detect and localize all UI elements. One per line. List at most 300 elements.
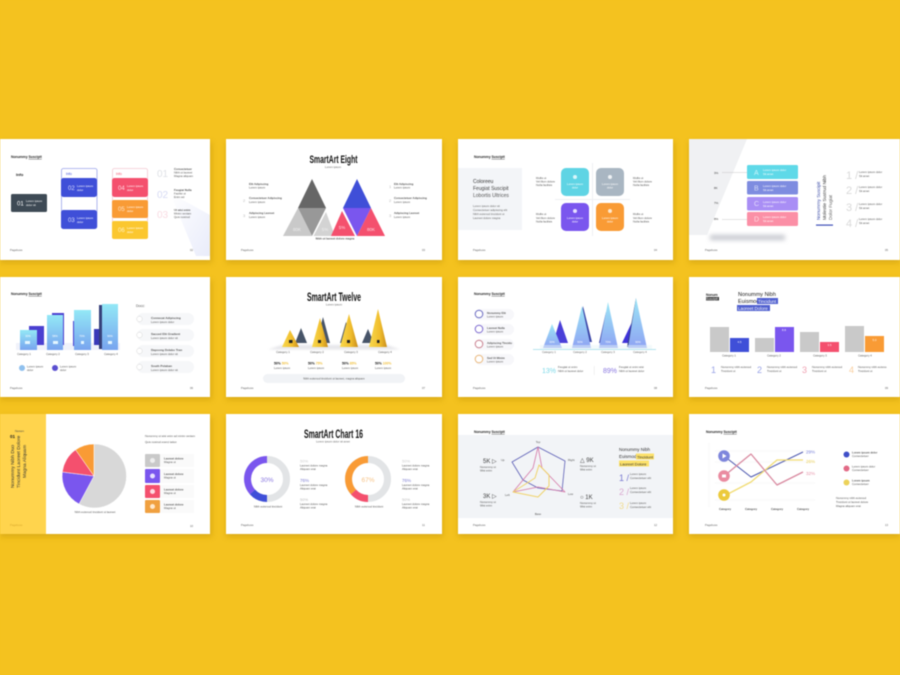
cone labels: Category 3 [344, 350, 358, 354]
stat 13%: 13% [542, 368, 556, 375]
big heading [737, 292, 778, 311]
numbered notes: Nonummy nibh euismod [812, 365, 843, 369]
footer: 12 [654, 523, 658, 527]
icon squares: Lorem ipsum [567, 216, 584, 220]
footer: Pageboss [705, 386, 718, 390]
card 01: dolor sit [26, 203, 36, 207]
legend cards [145, 454, 194, 513]
ring list: Adipiscing Tincidu [487, 341, 512, 345]
legend cards: Laoreet dolore [164, 472, 184, 476]
cone labels: Category 4 [378, 350, 392, 354]
card 01: Lorem ipsum [26, 199, 43, 203]
side panel [458, 168, 522, 230]
footer [10, 386, 194, 390]
legend: Lorem ipsum [60, 364, 77, 368]
numbered legend: Consectetuer elit [630, 476, 651, 480]
cone labels [276, 350, 392, 354]
card shadows [0, 142, 900, 537]
floor shadow [268, 345, 400, 350]
donut left [248, 460, 286, 498]
footer [473, 248, 658, 252]
column: cards 04, 05, 06: 04 [118, 186, 125, 192]
panel: SmartArt Eight triangles [226, 139, 442, 260]
legend: dolor [60, 368, 66, 372]
legend cards: Magna ut [164, 460, 176, 464]
numbered notes: Nonummy nibh euismo [858, 365, 887, 369]
note text: Tincidunt ut laoreet dolore [836, 500, 869, 504]
heading right [619, 447, 654, 466]
panel: paired bar chart [689, 277, 900, 397]
side labels: Mollis ut [536, 176, 546, 180]
column: cards 04, 05, 06: Lorem ipsum [127, 226, 144, 230]
radar stats: 5K ▷ [483, 459, 497, 465]
big heading: Euismod [738, 299, 759, 305]
column: cards 04, 05, 06: Info [116, 172, 122, 176]
left stats: 50% [300, 497, 308, 502]
ring list: Nonummy Elit [487, 311, 506, 315]
side labels: Nulla facilisis [536, 183, 553, 187]
footer [473, 523, 658, 527]
chart floor [16, 343, 120, 350]
numbered list: 01 [157, 169, 169, 180]
stat 13%: Feugiat ut enim [558, 365, 578, 369]
numbered legend: 3 / [619, 501, 630, 511]
footer: Pageboss [241, 523, 254, 527]
radar [512, 447, 565, 497]
numbered list: 02 [157, 190, 169, 201]
pyramid chart: 30% [549, 340, 555, 344]
numbered list: Lorem ipsum dolor [859, 170, 882, 174]
axis labels: Top [536, 440, 541, 444]
numbered legend [619, 472, 651, 511]
column: cards 04, 05, 06: dolor [127, 230, 133, 234]
numbered list: 3 / [846, 202, 859, 214]
side labels [536, 176, 652, 224]
pie caption: Nibh euismod tincidunt ut laoreet [75, 510, 116, 514]
legend: Lorem ipsum dolor [852, 450, 878, 454]
left list: 2 [243, 198, 246, 203]
list pills [137, 313, 194, 373]
triangle chart: colored [331, 179, 385, 236]
intro text: Quis nostrud exerci tation [145, 440, 177, 444]
donut right [348, 460, 388, 498]
page number: 10 [190, 524, 194, 528]
icon squares: dolor [607, 186, 613, 190]
side labels: Mollis ut [633, 176, 643, 180]
footer [10, 248, 194, 252]
panel: radar chart [458, 414, 673, 534]
legend [844, 450, 878, 486]
numbered legend: Lorem ipsum [630, 472, 647, 476]
right list: 1 [389, 184, 392, 189]
panel: four squares concept [458, 139, 673, 260]
bars [20, 304, 118, 350]
column: cards 04, 05, 06: 06 [118, 228, 125, 234]
note text [836, 496, 869, 508]
side panel: Lobortis Ultrices [473, 193, 509, 199]
bars A to D: B [754, 186, 759, 192]
numbered legend: 2 / [619, 487, 630, 497]
side panel: Feugiat Suscipit [473, 186, 509, 192]
footer [705, 386, 889, 390]
side panel: Consectetuer adipiscing elit [473, 208, 507, 212]
column: cards 04, 05, 06: dolor [127, 209, 133, 213]
footer: 03 [422, 248, 426, 252]
axis labels [17, 352, 118, 356]
pyramid chart [533, 298, 656, 350]
right list [389, 182, 427, 219]
intro text: Nonummy ut wisi enim ad minim veniam [145, 434, 196, 438]
bars A to D: Lorem ipsum dolor [763, 168, 786, 172]
series values: 29% [806, 450, 815, 454]
right stats: Laoreet dolore magna [402, 483, 430, 487]
triangle chart: gray: 80K [293, 227, 301, 232]
heading: Nonummy Suscipit [11, 292, 43, 296]
numbered list: Quis nostrud [174, 215, 190, 219]
list pills: Connecat Adipiscing [151, 316, 181, 320]
heading right: Tincidunt [637, 454, 654, 460]
subtitle: Lorem ipsum [326, 302, 343, 306]
legend: dolor [27, 368, 33, 372]
bars A to D [747, 165, 798, 226]
stat 13% [542, 365, 583, 375]
vertical heading: Nonummy Suscipit [816, 181, 821, 220]
side labels: Mollis ut [633, 212, 643, 216]
footer: Pageboss [10, 248, 23, 252]
right list: Lorem ipsum [394, 186, 411, 190]
axis labels: Base [535, 512, 542, 516]
left list: 3 [243, 213, 246, 218]
heading right: Laoreet Dolore [620, 462, 647, 466]
side labels: Nulla facilisis [633, 220, 650, 224]
title: SmartArt Twelve [307, 290, 361, 304]
left list: Consectetuer Adipiscing [249, 196, 282, 200]
radar stats: Wisi enim [480, 468, 493, 472]
percentage stats: 50% 75% [308, 362, 323, 366]
axis labels [719, 507, 810, 511]
ring list [475, 309, 514, 365]
legend cards: Laoreet dolore [164, 502, 184, 506]
left stats: Laoreet dolore magna [300, 464, 328, 468]
axis labels: Category 3 [75, 352, 89, 356]
legend: Lorem ipsum dolor [852, 464, 875, 468]
column: cards 04, 05, 06: 05 [118, 207, 125, 213]
ring list: Lorem ipsum [487, 314, 504, 318]
numbered list: 2 / [846, 185, 859, 197]
left stats: Laoreet dolore magna [300, 483, 328, 487]
list pills: Lorem ipsum dolor [151, 320, 174, 324]
axis labels: Category 1 [17, 352, 31, 356]
bars A to D: A [754, 170, 759, 177]
side labels: Nulla facilisis [536, 220, 553, 224]
chart labels: Category 3 [601, 350, 615, 354]
numbered notes [711, 365, 887, 375]
bars A to D: C [754, 201, 759, 208]
numbered list: Minim veniam [174, 212, 192, 216]
bars A to D: Lorem ipsum dolor [763, 200, 786, 204]
big heading: Nonummy Nibh [738, 292, 776, 298]
numbered list: Facilisi ut [174, 192, 186, 196]
column: cards 02 and 03: Info [66, 172, 72, 176]
left stats: 50% [300, 458, 308, 464]
icon squares: dolor [607, 220, 613, 224]
side labels: Nulla facilisis [633, 183, 650, 187]
slide 1 heading: Nonummy Suscipit [11, 155, 43, 159]
ring list: Laoreet Nulla [487, 326, 505, 330]
radar stats: 3K ▷ [483, 494, 497, 500]
big heading: Tincidunt [758, 299, 777, 304]
yellow sidebar: Nonum [15, 429, 25, 433]
footer: Pageboss [241, 386, 254, 390]
stat 89%: Feugiat ut enim wisi [619, 365, 644, 369]
footer: Pageboss [705, 523, 718, 527]
left list: Lorem ipsum [249, 200, 266, 204]
heading: Nonummy Suscipit [706, 430, 738, 434]
list pills: Lorem ipsum dolor sit [151, 368, 178, 372]
category labels: Category 3 [813, 354, 827, 358]
bars A to D: Sit amet [763, 188, 773, 192]
icon squares [555, 163, 630, 236]
radar stats: Nonummy ut [580, 464, 596, 468]
right stats: Aliquam erat [402, 467, 418, 471]
labels left: 8K [714, 186, 718, 190]
panel: SmartArt Twelve cones [226, 277, 442, 397]
numbered list: Sit amet [859, 174, 869, 178]
right stats: Aliquam erat [402, 506, 418, 510]
subtitle: Lorem ipsum [325, 165, 342, 169]
triangle chart: colored: 80K [367, 227, 375, 232]
numbered notes: 2 [757, 365, 762, 375]
numbered list: Sit amet [859, 189, 869, 193]
stat 89%: Nibh ut laoreet dolor [619, 369, 644, 373]
yellow sidebar: Pageboss [10, 523, 23, 527]
labels left: 7% [714, 201, 719, 205]
panel: pyramids with rings [458, 277, 673, 397]
series values [806, 450, 815, 476]
card 01 [11, 172, 47, 212]
list pills: Lorem ipsum dolor sit [151, 352, 178, 356]
triangle chart: colored: 5% [339, 225, 345, 230]
bars A to D: Lorem ipsum dolor [763, 215, 786, 219]
numbered legend: Lorem ipsum [630, 486, 647, 490]
numbered list [846, 170, 882, 230]
icon squares: Lorem ipsum [602, 216, 619, 220]
percentage stats: 50% 85% [342, 362, 357, 366]
percentage stats [274, 362, 392, 370]
numbered notes: Tincidunt ut [858, 369, 873, 373]
series values: 32% [806, 471, 815, 476]
cone labels: Category 1 [276, 350, 290, 354]
right stats: 50% [402, 458, 410, 464]
column: cards 04, 05, 06: dolor [127, 188, 133, 192]
stat 89%: 89% [603, 368, 617, 375]
footer: 02 [190, 248, 194, 252]
list heading: Docc: [136, 304, 145, 308]
left list [243, 182, 282, 219]
column: cards 02 and 03 [61, 168, 97, 229]
list pills: Dapoong Dolabo Tran [151, 348, 182, 352]
footer [705, 523, 889, 527]
donut captions: Nibh euismod tincidunt [254, 504, 282, 508]
ring list: Lorem ipsum [487, 344, 504, 348]
numbered legend: Consectetuer elit [630, 490, 651, 494]
column: cards 02 and 03: 02 [68, 186, 75, 192]
yellow sidebar: Tincidunt Laoreet Dolore [16, 435, 22, 488]
right stats: Aliquam erat [402, 486, 418, 490]
numbered list: Lorem ipsum dolor [859, 185, 882, 189]
axis labels: Low [568, 492, 574, 496]
legend cards: Magna ut [164, 491, 176, 495]
list pills: Lorem ipsum dolor sit [151, 336, 178, 340]
donut right: 67% [361, 477, 375, 484]
heading: Nonummy Suscipit [474, 155, 506, 159]
axes and grid [709, 443, 815, 507]
footer [241, 523, 425, 527]
line series [724, 452, 803, 496]
right list: Consectetuer Adipiscing [394, 196, 427, 200]
bars: 70% [79, 334, 85, 338]
card 01: 01 [17, 202, 24, 208]
footer: Pageboss [473, 248, 486, 252]
percentage stats: Lorem ipsum [342, 366, 359, 370]
bars: 90% [107, 334, 113, 338]
panel: 3D bar chart [0, 277, 210, 397]
axis labels: Right [568, 458, 575, 462]
numbered list: Consectetuer [174, 167, 193, 171]
left stats: Aliquam erat [300, 486, 316, 490]
big heading: Laoreet Dolore [738, 306, 768, 311]
category labels: Category 2 [767, 354, 781, 358]
ring list: Sed Ut Minim [487, 356, 505, 360]
panel: pie chart slide [0, 414, 210, 534]
side labels: Vel illum dolore [536, 180, 555, 184]
legend [19, 364, 77, 372]
legend cards: Magna ut [164, 476, 176, 480]
numbered notes: Nonummy nibh euismod [721, 365, 752, 369]
stat 13%: Nibh ut laoreet dolor [558, 369, 583, 373]
percentage stats: Lorem ipsum [308, 366, 325, 370]
caption: Nibh ut laoreet dolore magna [316, 236, 355, 240]
caption pill [263, 374, 405, 383]
left stats [300, 458, 328, 510]
small heading: Suscipit [706, 297, 718, 301]
numbered legend: Consectetuer elit [630, 505, 651, 509]
right list: 2 [389, 198, 392, 203]
pyramid chart: 70% [605, 340, 611, 344]
cones [282, 309, 387, 347]
column: cards 02 and 03: dolor [77, 220, 83, 224]
percentage stats: 50% 100% [375, 362, 391, 366]
triangle chart: gray: 5% [322, 227, 328, 232]
chart labels: Category 1 [542, 350, 556, 354]
numbered legend: 1 / [619, 473, 630, 483]
heading: Nonummy Suscipit [474, 430, 506, 434]
yellow sidebar: Nonummy Nibh Duo [10, 444, 16, 488]
right stats: Laoreet dolore magna [402, 464, 430, 468]
intro text [145, 434, 196, 444]
axis labels: Up [501, 458, 505, 462]
percentage stats: Lorem ipsum [274, 366, 291, 370]
side panel: Lorem ipsum dolor sit [473, 204, 500, 208]
axis labels: Category 4 [104, 352, 118, 356]
axis labels: Category 2 [46, 352, 60, 356]
yellow sidebar: Magna Aliquam [22, 445, 28, 478]
ring list: Lorem ipsum [487, 330, 504, 334]
axis labels: Category [745, 507, 758, 511]
right stats: 76% [402, 478, 411, 483]
chart labels [542, 350, 647, 354]
footer: 07 [422, 386, 426, 390]
axis labels: Category [797, 507, 810, 511]
column: cards 04, 05, 06 [112, 168, 148, 239]
bars A to D: Lorem ipsum dolor [763, 184, 786, 188]
radar stats: Nonummy ut [480, 465, 496, 469]
donut captions: Nibh euismod tincidunt [355, 504, 383, 508]
labels left [714, 171, 747, 221]
footer [473, 386, 658, 390]
bars: 4.5 [738, 340, 742, 344]
category labels: Category 4 [858, 354, 872, 358]
icon squares: Lorem ipsum [567, 182, 584, 186]
radar stats: Nonummy ut [480, 500, 496, 504]
left stats: Laoreet dolore magna [300, 502, 328, 506]
column: cards 02 and 03: Lorem ipsum [77, 216, 94, 220]
footer [241, 386, 426, 390]
labels left: 3% [714, 171, 719, 175]
title: SmartArt Chart 16 [304, 429, 363, 441]
left list: Lorem ipsum [249, 215, 266, 219]
numbered legend: Lorem ipsum [630, 501, 647, 505]
right stats: Laoreet dolore magna [402, 502, 430, 506]
right stats [402, 458, 430, 510]
legend: Lorem ipsum [852, 478, 870, 482]
numbered list: Enim ad [174, 195, 185, 199]
footer: Pageboss [241, 248, 254, 252]
axis labels: Category [771, 507, 784, 511]
footer: 09 [885, 386, 889, 390]
side labels: Vel illum dolore [633, 180, 652, 184]
percentage stats: 50% 50% [274, 362, 289, 366]
legend: Consectetuer [852, 454, 869, 458]
left list: Adipiscing Laoreet [249, 211, 274, 215]
side labels: Mollis ut [536, 212, 546, 216]
subtitle: Lorem ipsum dolor sit amet [316, 440, 350, 444]
donut captions [254, 504, 383, 508]
category labels: Category 1 [722, 354, 736, 358]
small heading [706, 293, 719, 301]
side labels: Vel illum dolore [536, 216, 555, 220]
footer: 13 [885, 523, 889, 527]
right list: Lorem ipsum [394, 200, 411, 204]
vertical heading [816, 175, 833, 226]
numbered list: Ut wisi enim [174, 208, 191, 212]
radar stats: Wisi enim [480, 504, 493, 508]
footer: 11 [422, 523, 425, 527]
bars A to D: Sit amet [763, 204, 773, 208]
footer [241, 248, 426, 252]
column: cards 04, 05, 06: Lorem ipsum [127, 205, 144, 209]
pyramid chart: 50% [577, 340, 583, 344]
legend cards: Laoreet dolore [164, 456, 184, 460]
bars A to D: D [754, 216, 759, 224]
bar shadow [710, 235, 785, 240]
footer: 05 [885, 248, 889, 252]
column: cards 02 and 03: 03 [68, 218, 75, 224]
side panel: Coloreeu [473, 179, 494, 185]
radar stats: △ 9K [580, 458, 594, 464]
column: cards 02 and 03: dolor [77, 188, 83, 192]
numbered notes: Tincidunt ut [721, 369, 736, 373]
